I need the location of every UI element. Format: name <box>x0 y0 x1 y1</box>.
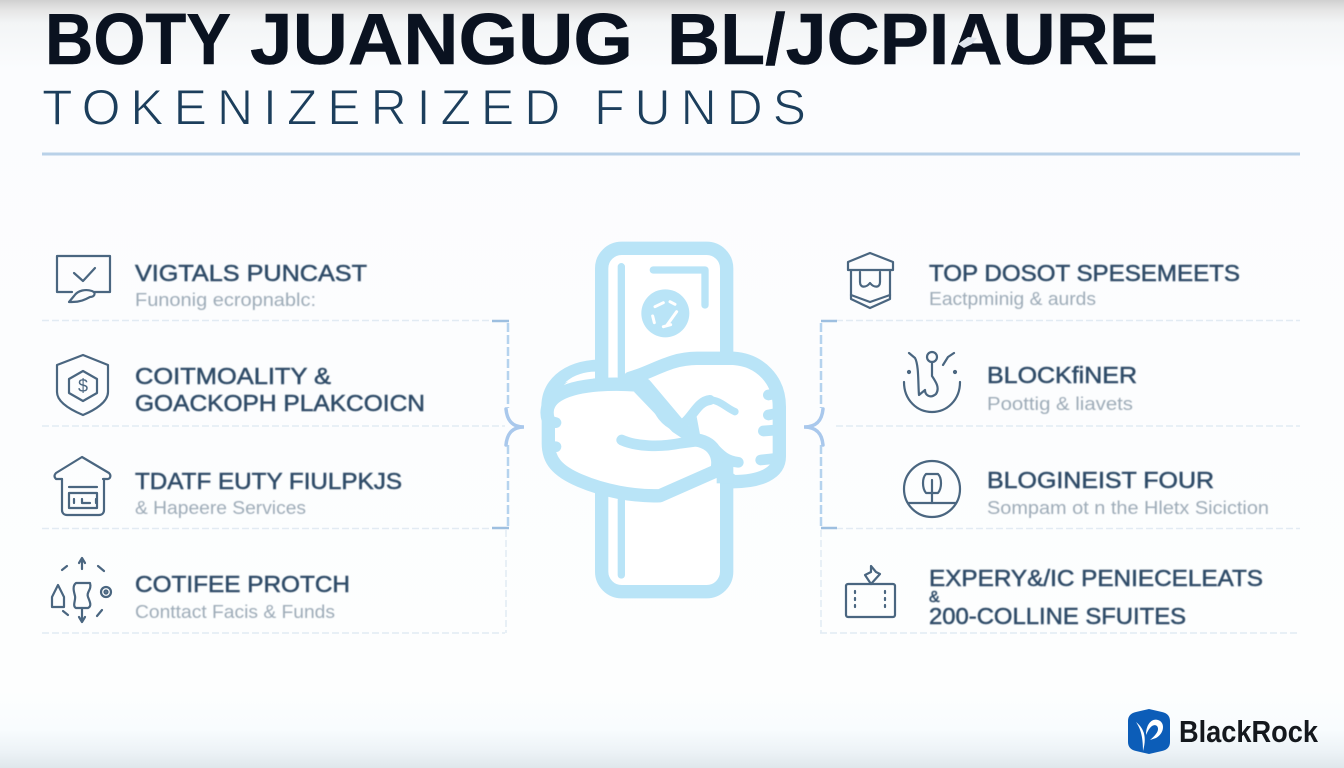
logo: BlackRock: BlackRock <box>1179 714 1319 749</box>
item: BLOCKfINER: Poottig & liavets <box>987 394 1133 414</box>
icon: shield with dollar <box>57 355 108 415</box>
item: BLOCKfINER: BLOCKfiNER <box>987 362 1137 388</box>
item: BLOGINEIST FOUR: BLOGINEIST FOUR <box>987 467 1214 493</box>
right column dividers and bracket <box>804 320 1300 633</box>
central icon: hands holding tokenized phone <box>547 248 779 592</box>
item: EXPERY <box>846 565 1263 629</box>
back hand <box>630 358 779 482</box>
icon: network cluster <box>52 558 111 622</box>
item: EXPERY: & <box>929 589 940 606</box>
item: BLOGINEIST FOUR: Sompam ot n the Hletx Siciction <box>987 498 1269 518</box>
front hand <box>547 384 718 496</box>
item: EXPERY: EXPERY&/IC PENIECELEATS <box>929 565 1263 591</box>
item: TDATF EUTY <box>54 457 402 518</box>
icon: monitor with check <box>57 256 110 302</box>
left column dividers and bracket <box>42 320 524 633</box>
item: TOP DOSOT: Eactpminig & aurds <box>929 289 1096 309</box>
title <box>45 0 1158 80</box>
item: COTIFEE PROTCH: Conttact Facis & Funds <box>135 602 335 622</box>
item: COITMOALITY <box>57 355 425 416</box>
item: BLOGINEIST FOUR <box>904 461 1269 518</box>
icon: logo hexagon <box>1128 709 1170 754</box>
item: TDATF EUTY: TDATF EUTY FIULPKJS <box>135 468 402 494</box>
icon: tree in circle <box>904 461 960 517</box>
icon: board with marker <box>846 566 895 617</box>
item: VIGTALS PUNCAST: VIGTALS PUNCAST <box>135 260 367 286</box>
icon: house with panel <box>54 457 110 515</box>
item: TDATF EUTY: & Hapeere Services <box>135 498 306 518</box>
icon: circuit bowl <box>904 352 960 412</box>
icon: shield with dollar: $ <box>78 376 88 396</box>
upper left wrist <box>548 366 600 407</box>
item: COTIFEE PROTCH <box>52 558 350 622</box>
item: TOP DOSOT: TOP DOSOT SPESEMEETS <box>929 260 1240 286</box>
item: COITMOALITY: GOACKOPH PLAKCOICN <box>135 390 425 416</box>
item: COTIFEE PROTCH: COTIFEE PROTCH <box>135 571 350 597</box>
item: COITMOALITY: COITMOALITY & <box>135 363 331 389</box>
item: EXPERY: 200-COLLINE SFUITES <box>929 603 1186 629</box>
logo: BlackRock <box>1128 709 1319 754</box>
item: BLOCKfINER <box>904 352 1137 414</box>
item: VIGTALS PUNCAST <box>57 256 367 310</box>
icon: vault <box>848 253 893 308</box>
header rule <box>42 152 1300 156</box>
item: TOP DOSOT <box>848 253 1240 309</box>
title: BOTY <box>45 0 231 80</box>
title: JUANGUG <box>250 0 633 80</box>
subtitle: TOKENIZERIZED FUNDS <box>42 80 806 136</box>
title: BL/JCPIAURE <box>667 0 1158 80</box>
item: VIGTALS PUNCAST: Funonig ecropnablc: <box>135 290 316 310</box>
thumb and fingers <box>645 386 710 427</box>
